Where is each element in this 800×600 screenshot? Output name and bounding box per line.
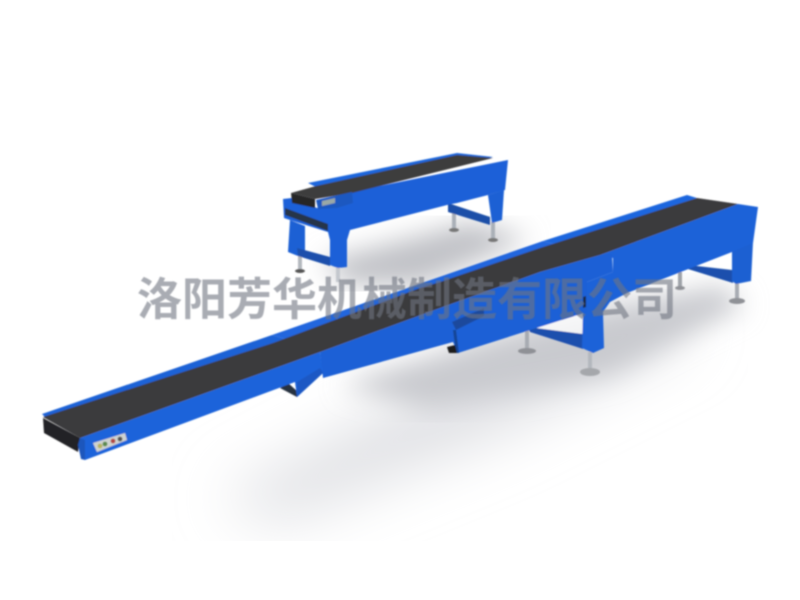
control box (93, 433, 127, 452)
small conveyor belt (291, 155, 493, 199)
small conveyor top rail (308, 153, 493, 192)
middle bracket cut-out (447, 345, 457, 353)
rear section side (582, 204, 758, 353)
rear section top rail (543, 195, 697, 245)
front section side (78, 352, 323, 460)
rear legs (675, 242, 753, 304)
small conveyor body (283, 160, 508, 268)
middle front leg (518, 312, 600, 376)
belt (43, 198, 738, 438)
floor shadows (220, 222, 745, 520)
far rail (42, 335, 288, 418)
watermark text: 洛阳芳华机械制造有限公司 (137, 274, 677, 325)
long conveyor (42, 195, 758, 460)
small conveyor front legs (288, 220, 340, 282)
middle section top rail (272, 241, 558, 340)
small conveyor (283, 153, 508, 282)
small conveyor rear upright (488, 190, 504, 223)
front section bracket (280, 383, 297, 397)
small conveyor inner mechanism (285, 208, 328, 231)
end plate (78, 438, 85, 460)
small conveyor roller cap (316, 192, 353, 209)
middle section side (320, 254, 613, 378)
small conveyor rear legs (448, 203, 498, 242)
middle section shaded notches (452, 296, 586, 353)
